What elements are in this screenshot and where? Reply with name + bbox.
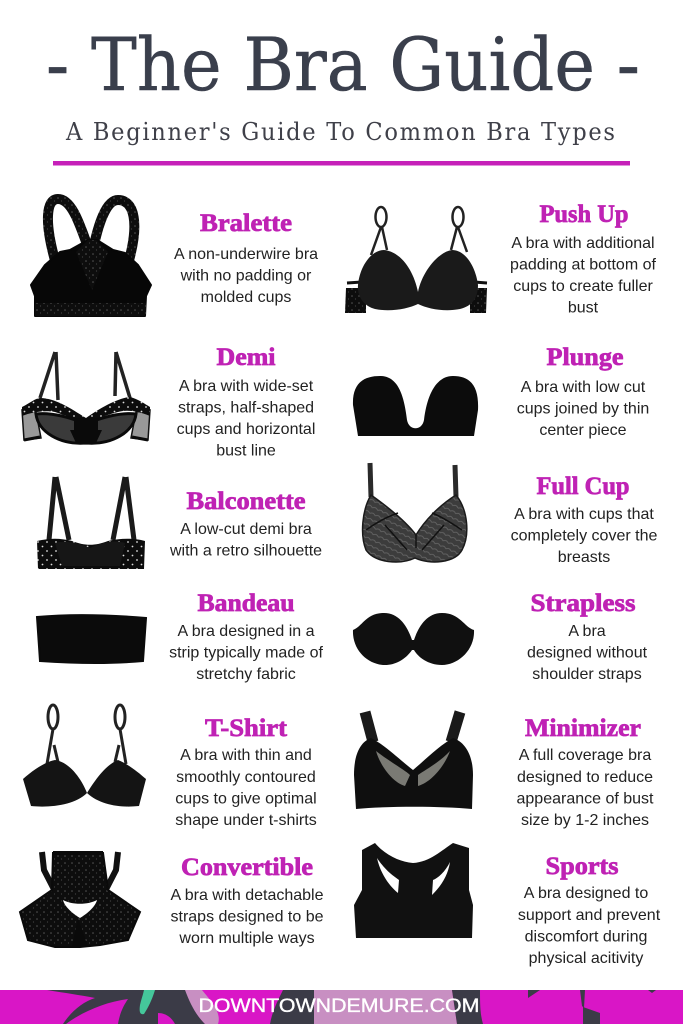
description: Push Up: padding at bottom of	[510, 256, 656, 274]
heading: Push Up: Push Up	[540, 201, 628, 228]
icon: balconette bra	[37, 477, 145, 569]
description: Bandeau: stretchy fabric	[196, 666, 296, 683]
heading: Convertible: Convertible	[181, 854, 313, 881]
description: Sports: support and prevent	[518, 907, 661, 924]
panel: Bandeau	[37, 590, 323, 683]
panel: Bralette	[31, 199, 318, 316]
panel: Balconette	[37, 477, 322, 569]
icon: full cup bra	[363, 463, 467, 562]
icon: bandeau	[37, 615, 146, 663]
title: - The Bra Guide -	[46, 23, 640, 108]
description: Minimizer: appearance of bust	[516, 790, 654, 808]
heading: Full Cup: Full Cup	[536, 473, 630, 500]
footer text: DOWNTOWNDEMURE.COM	[198, 995, 480, 1017]
description: Full Cup: A bra with cups that	[514, 506, 654, 523]
description: Push Up: A bra with additional	[511, 235, 655, 252]
icon: push up bra	[345, 207, 487, 313]
panel: Full Cup	[363, 463, 657, 566]
description: Bralette: molded cups	[201, 289, 291, 306]
description: Demi: A bra with wide-set	[179, 378, 314, 395]
description: Full Cup: completely cover the	[511, 528, 657, 544]
description: Bralette: with no padding or	[180, 268, 312, 284]
icon: plunge bra	[353, 376, 478, 436]
heading: T-Shirt: T-Shirt	[205, 715, 288, 742]
heading: Bandeau: Bandeau	[198, 590, 295, 617]
description: Minimizer: size by 1-2 inches	[521, 812, 649, 829]
description: Balconette: A low-cut demi bra	[180, 521, 312, 538]
description: Strapless: A bra	[568, 623, 606, 640]
subtitle: A Beginner's Guide To Common Bra Types	[65, 118, 615, 146]
description: Push Up: bust	[568, 300, 599, 316]
description: T-Shirt: shape under t-shirts	[175, 812, 317, 829]
description: Sports: discomfort during	[525, 928, 647, 946]
description: Sports: physical acitivity	[529, 950, 643, 967]
description: Strapless: shoulder straps	[532, 666, 642, 683]
icon: t-shirt bra	[23, 705, 146, 807]
heading: Balconette: Balconette	[186, 488, 306, 515]
description: Push Up: cups to create fuller	[513, 278, 653, 295]
panel: Plunge	[353, 344, 649, 439]
description: Plunge: cups joined by thin	[517, 400, 649, 418]
description: Convertible: worn multiple ways	[178, 930, 315, 947]
description: Convertible: A bra with detachable	[170, 887, 324, 904]
icon: sports bra	[354, 843, 473, 938]
description: Minimizer: A full coverage bra	[519, 747, 651, 764]
description: Bandeau: strip typically made of	[169, 644, 323, 662]
icon: bralette	[31, 199, 151, 316]
heading: Sports: Sports	[546, 853, 619, 880]
description: Plunge: center piece	[539, 422, 627, 439]
icon: strapless bra	[353, 613, 474, 665]
panel: T-Shirt	[23, 705, 317, 829]
heading: Plunge: Plunge	[546, 344, 624, 371]
panel: Demi	[22, 344, 315, 460]
panel: Minimizer	[354, 712, 654, 829]
description: Bandeau: A bra designed in a	[178, 623, 315, 640]
panel: Sports	[354, 843, 661, 967]
panel: Strapless	[353, 590, 648, 683]
heading: Minimizer: Minimizer	[525, 715, 641, 742]
heading: Strapless: Strapless	[530, 590, 636, 617]
panel: Convertible	[20, 851, 324, 947]
footer banner	[0, 990, 683, 1024]
description: Demi: straps, half-shaped	[178, 400, 314, 416]
icon: minimizer bra	[354, 712, 473, 809]
description: T-Shirt: cups to give optimal	[175, 790, 317, 808]
heading: Bralette: Bralette	[200, 210, 292, 237]
description: Sports: A bra designed to	[524, 885, 648, 902]
description: Plunge: A bra with low cut	[521, 379, 646, 396]
panel: Push Up	[345, 201, 656, 316]
description: T-Shirt: A bra with thin and	[180, 747, 312, 764]
icon: convertible bra	[20, 851, 140, 947]
description: Strapless: designed without	[527, 644, 648, 662]
icon: demi bra	[22, 352, 150, 443]
description: Demi: cups and horizontal	[177, 421, 315, 438]
description: Demi: bust line	[216, 442, 276, 460]
description: T-Shirt: smoothly contoured	[176, 769, 316, 786]
description: Full Cup: breasts	[558, 549, 610, 566]
description: Balconette: with a retro silhouette	[169, 542, 322, 560]
description: Convertible: straps designed to be	[170, 908, 324, 926]
description: Minimizer: designed to reduce	[517, 769, 653, 786]
description: Bralette: A non-underwire bra	[174, 246, 318, 263]
heading: Demi: Demi	[216, 344, 276, 371]
